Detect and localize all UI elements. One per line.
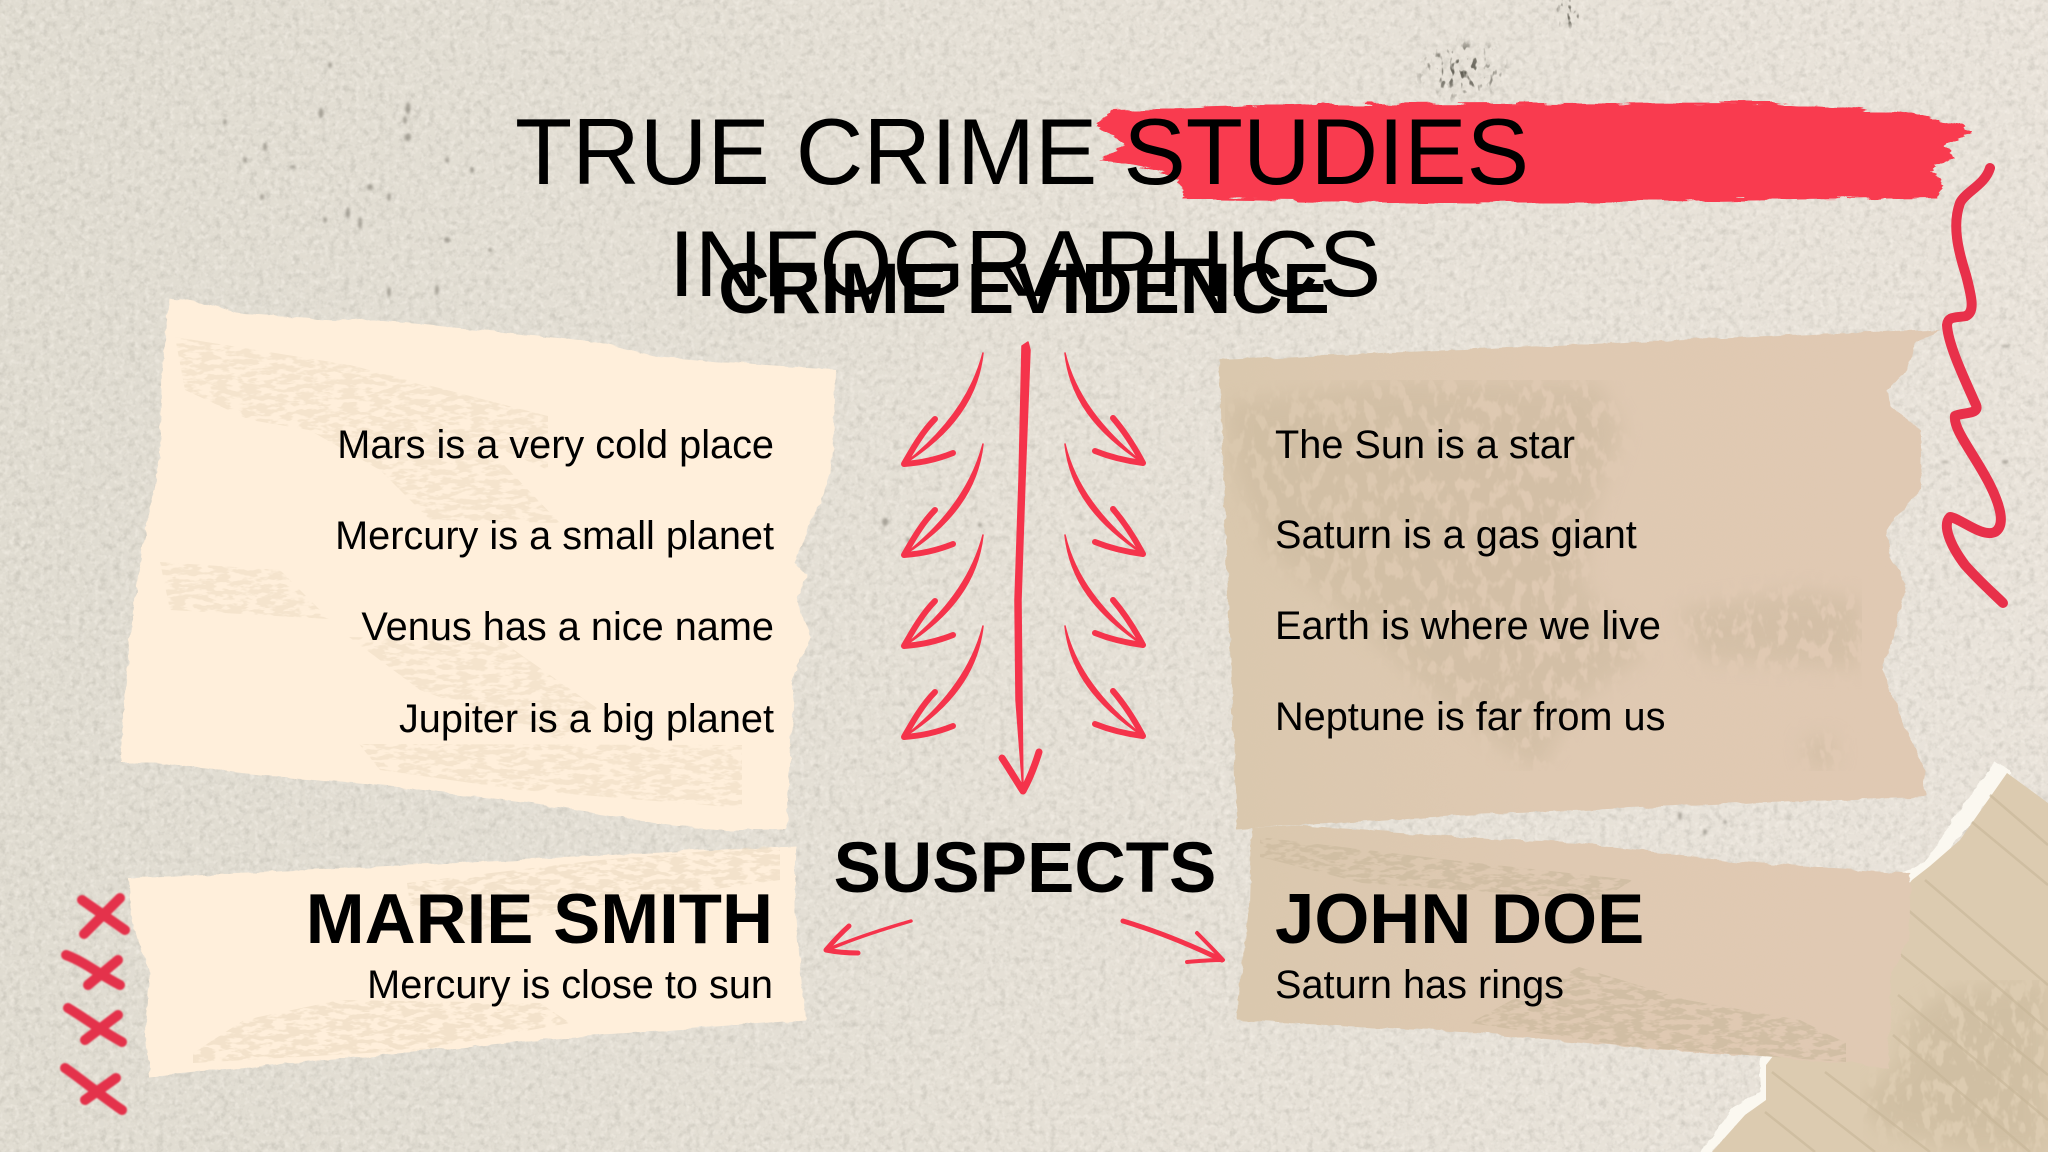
text block: left evidence list: Jupiter is a big planet: [399, 697, 774, 741]
text block: right evidence list: [1275, 423, 1665, 739]
panel: left evidence paper: [120, 298, 835, 830]
text block: right evidence list: Neptune is far from us: [1275, 695, 1665, 739]
panel: John Doe paper: [1237, 826, 1911, 1070]
text block: right evidence list: The Sun is a star: [1275, 423, 1575, 467]
arrows: right evidence: [1065, 353, 1143, 736]
icon: red cross marks: [65, 898, 125, 1110]
panel: right evidence paper: [1219, 329, 1941, 829]
text block: left evidence list: Mercury is a small planet: [335, 514, 774, 558]
heading: suspects: SUSPECTS: [834, 829, 1216, 908]
arrows: left evidence: [904, 353, 983, 737]
text block: left evidence list: Venus has a nice name: [361, 605, 774, 649]
name: John Doe: Saturn has rings: [1275, 963, 1564, 1007]
name: Marie Smith: [306, 879, 773, 1007]
torn corner paper: [1700, 760, 2048, 1152]
text block: left evidence list: Mars is a very cold place: [337, 423, 774, 467]
title: TRUE CRIME STUDIES: [515, 99, 1529, 204]
name: Marie Smith: Mercury is close to sun: [367, 963, 773, 1007]
red brush stroke: [1095, 103, 1972, 203]
panel: Marie Smith paper: [129, 845, 805, 1077]
title: INFOGRAPHICS: [669, 211, 1381, 316]
name: Marie Smith: MARIE SMITH: [306, 879, 773, 958]
heading: crime evidence: CRIME EVIDENCE: [718, 250, 1330, 329]
text block: right evidence list: Earth is where we live: [1275, 604, 1661, 648]
red squiggle: [1947, 168, 2003, 603]
name: John Doe: [1275, 879, 1644, 1007]
arrow: to John Doe: [1123, 921, 1223, 962]
text block: right evidence list: Saturn is a gas giant: [1275, 513, 1637, 557]
title: [515, 99, 1529, 316]
name: John Doe: JOHN DOE: [1275, 879, 1644, 958]
arrow: center down: [1002, 342, 1039, 792]
arrow: to Marie Smith: [826, 921, 911, 953]
text block: left evidence list: [335, 423, 774, 741]
